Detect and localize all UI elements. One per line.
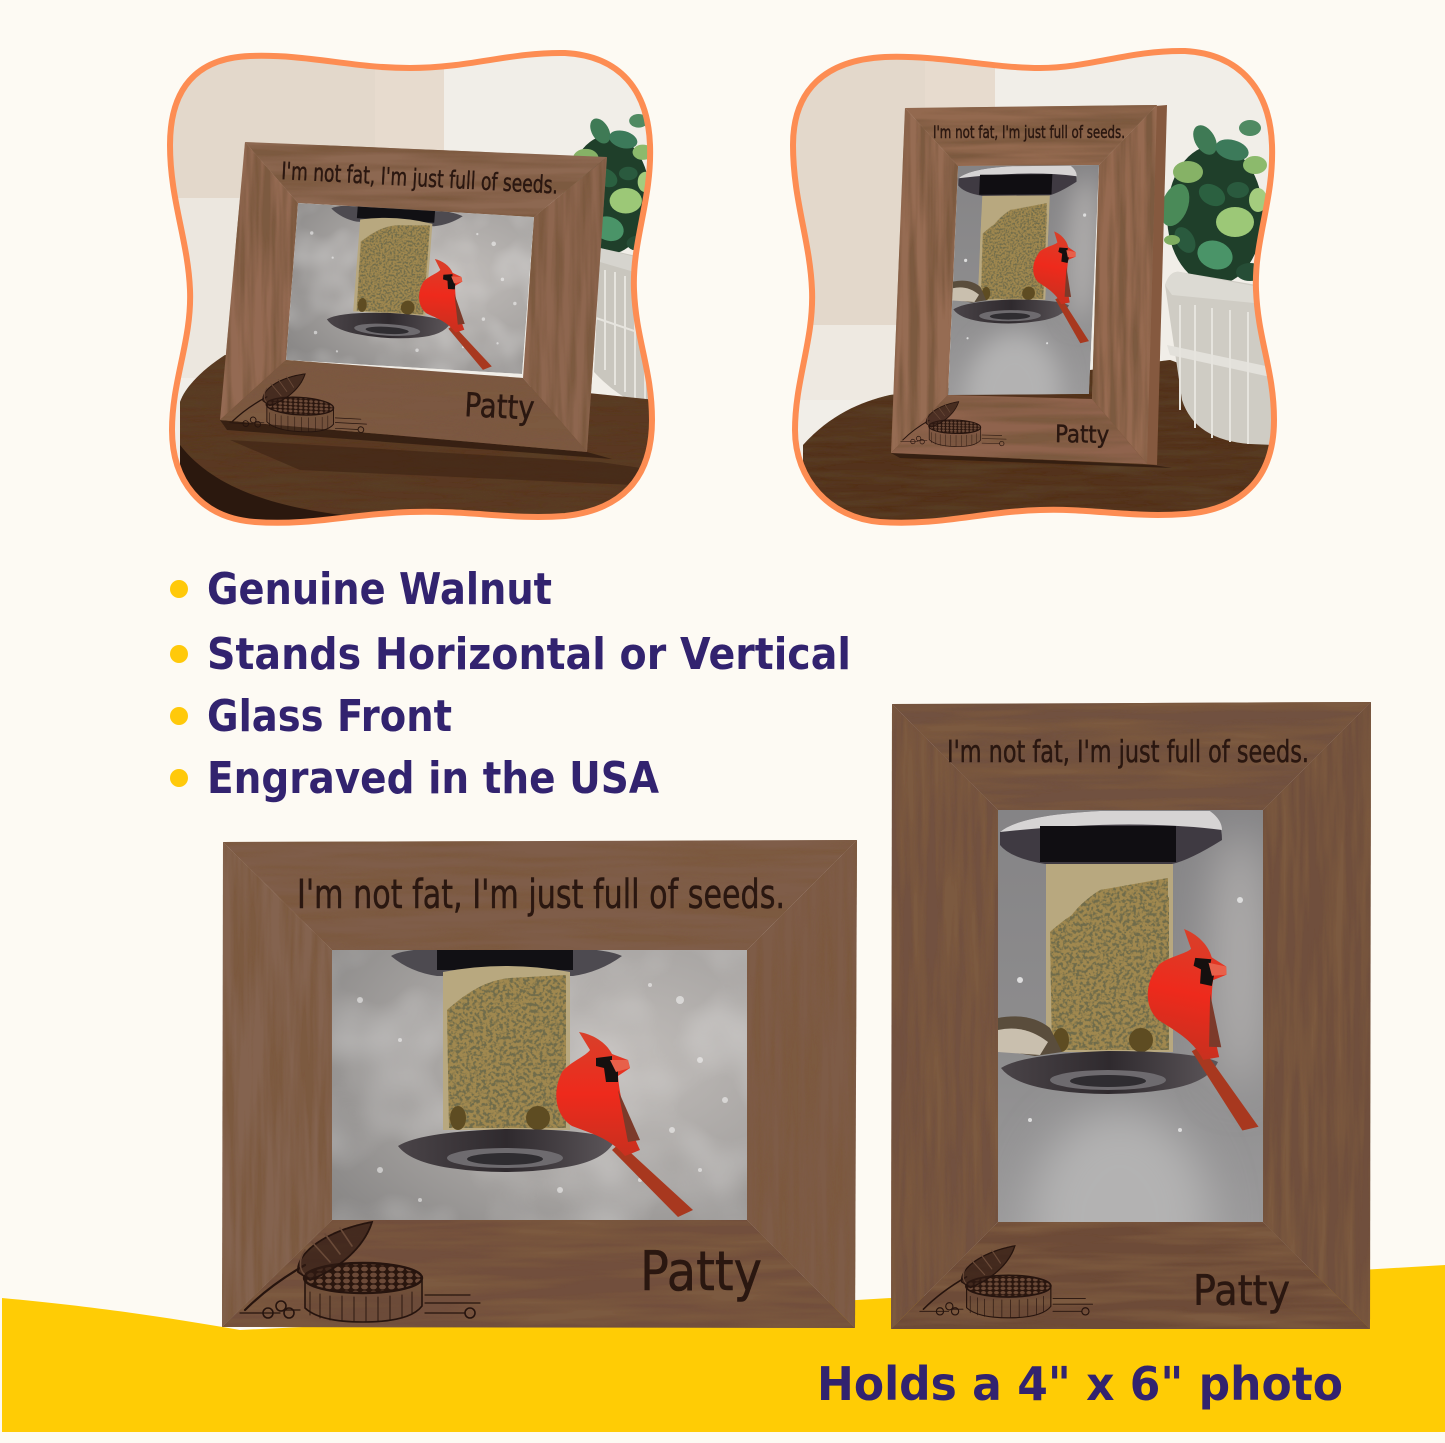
engraved quote: I'm not fat, I'm just full of seeds. [297,872,785,918]
product: large vertical frame [891,702,1371,1330]
frame: angled horizontal walnut frame [220,142,612,459]
feature list [170,564,851,804]
engraving: seed bowl [920,1246,1093,1318]
bullet: engraved in the usa: Engraved in the USA [207,753,659,804]
engraving: seed bowl [230,370,367,435]
bullet: genuine walnut: Genuine Walnut [207,564,552,615]
photo: cardinal at feeder, portrait [998,810,1296,1330]
engraved name: Patty [1055,420,1109,449]
caption: photo size: Holds a 4" x 6" photo [817,1357,1343,1411]
engraved quote: I'm not fat, I'm just full of seeds. [933,123,1125,143]
frame: angled vertical walnut frame [891,105,1172,468]
panel: vertical lifestyle photo [790,45,1280,530]
bullet: stands horizontal or vertical: Stands Horizontal or Vertical [207,629,851,680]
engraved quote: I'm not fat, I'm just full of seeds. [947,735,1309,770]
engraved name: Patty [464,385,536,428]
engraving: seed bowl [901,400,1006,448]
engraved quote: I'm not fat, I'm just full of seeds. [281,157,559,199]
engraved name: Patty [1193,1266,1290,1315]
product: large horizontal frame [222,840,857,1328]
photo: cardinal at feeder [332,948,747,1220]
engraving: seed bowl [240,1222,480,1322]
photo border [793,51,1274,523]
photo border [170,53,652,523]
yellow wave band [2,1265,1445,1432]
panel: horizontal lifestyle photo [165,50,655,530]
engraved name: Patty [640,1240,762,1303]
bullet: glass front: Glass Front [207,691,452,742]
